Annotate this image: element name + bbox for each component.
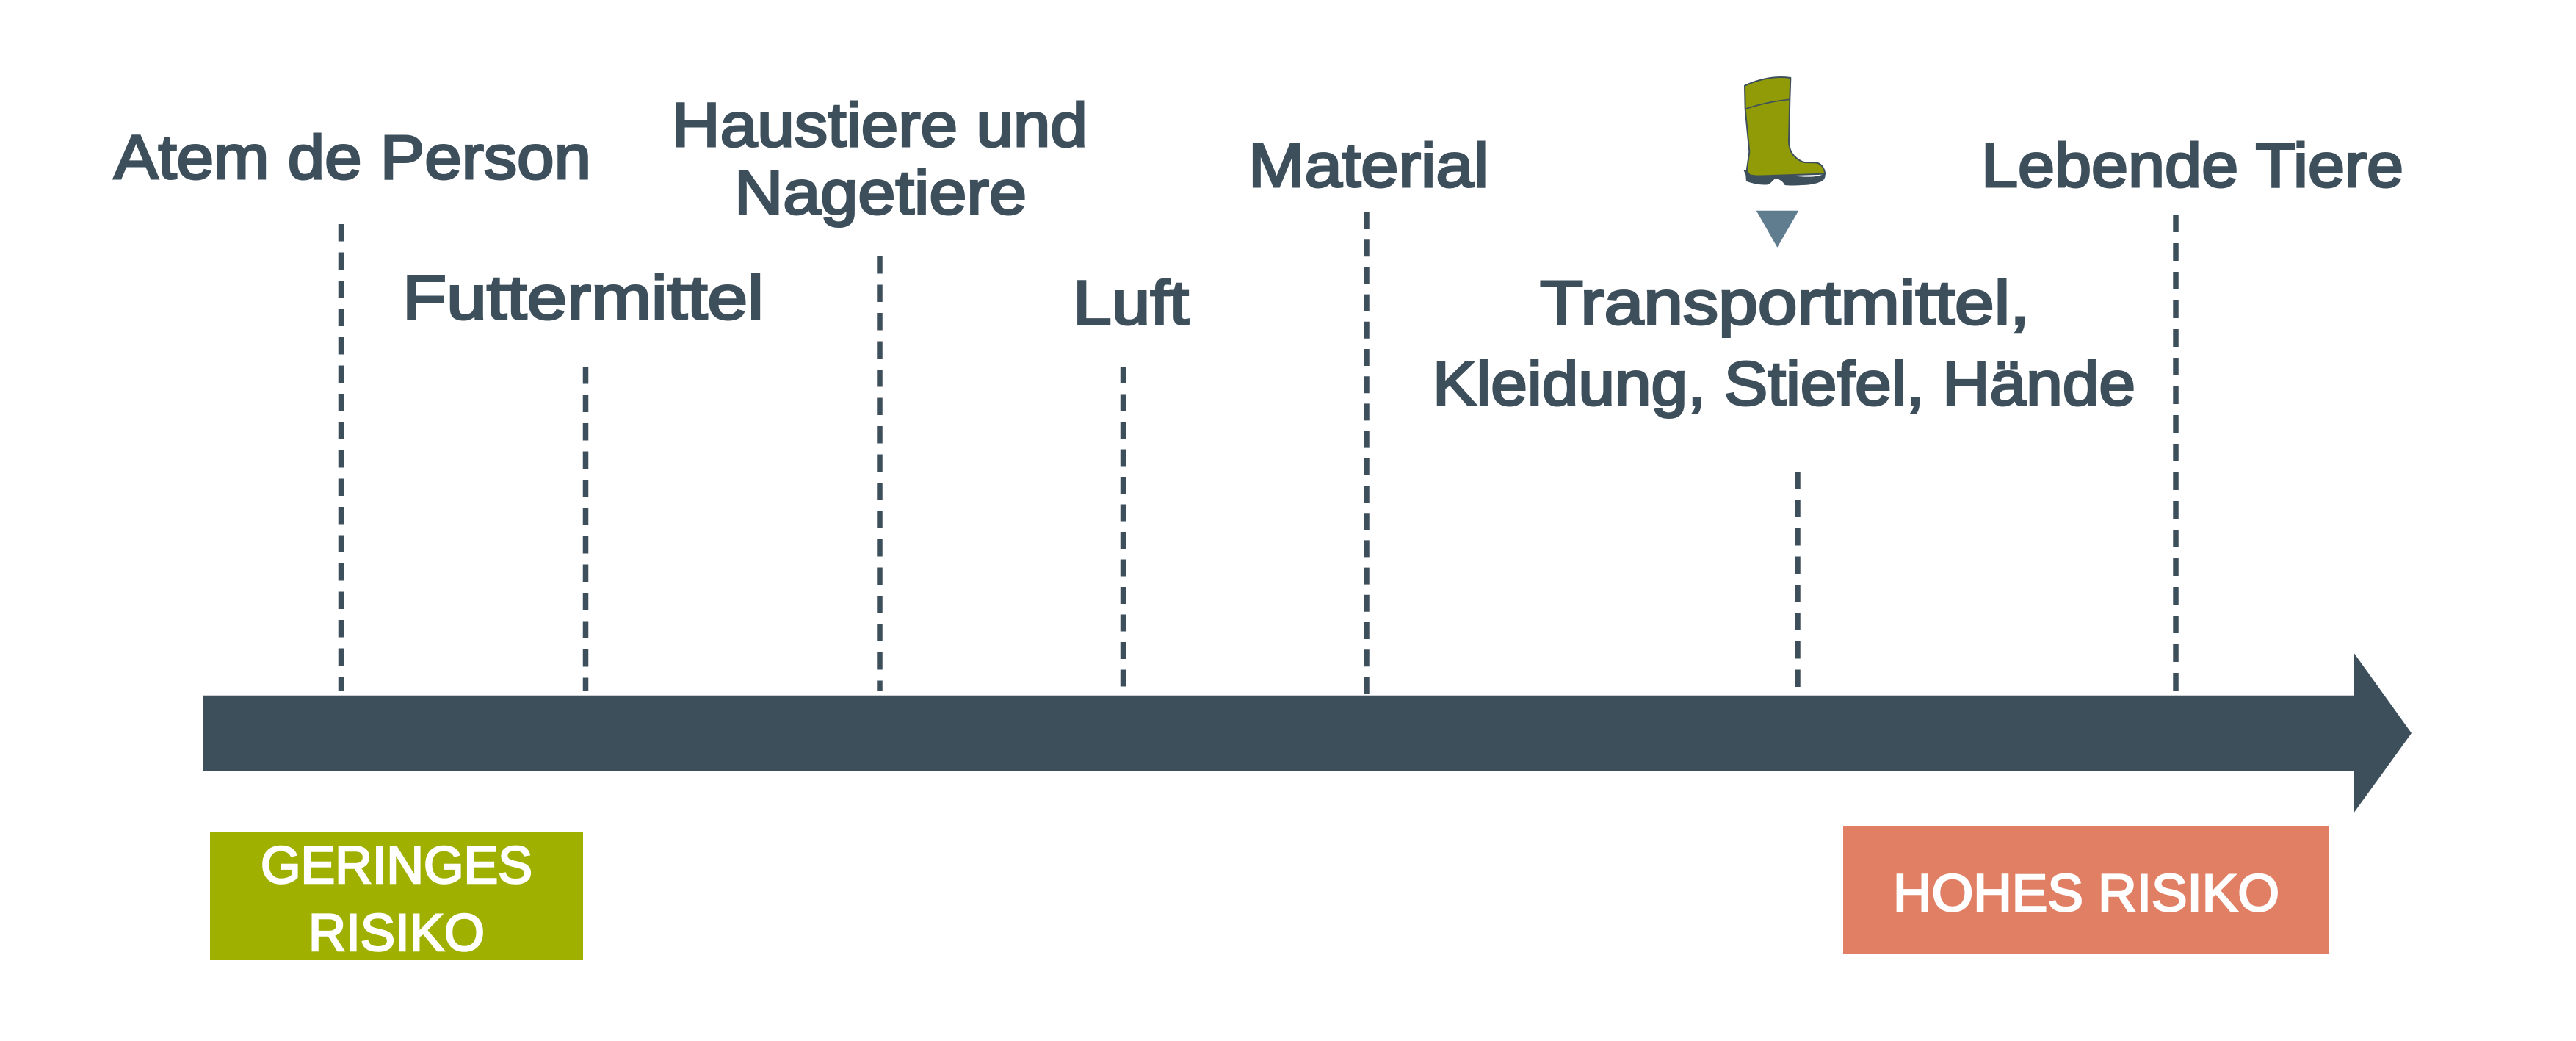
box: low risk: [210, 832, 583, 962]
label: Lebende Tiere: Lebende Tiere: [1981, 131, 2403, 200]
label: Atem de Person: Atem de Person: [114, 123, 591, 192]
label: Haustiere und Nagetiere: Haustiere und: [672, 90, 1088, 159]
label: Material: Material: [1248, 131, 1488, 200]
arrow: risk axis: [203, 652, 2412, 813]
icon: boot: [1744, 77, 1826, 185]
label: Futtermittel: Futtermittel: [402, 263, 764, 332]
box: high risk: [1843, 826, 2329, 954]
label: Luft: Luft: [1073, 268, 1189, 337]
label: Haustiere und Nagetiere: [672, 90, 1088, 691]
label: Transportmittel, Kleidung, Stiefel, Hände: Kleidung, Stiefel, Hände: [1433, 349, 2135, 418]
label: Transportmittel, Kleidung, Stiefel, Hände: [1433, 268, 2135, 691]
label: Transportmittel, Kleidung, Stiefel, Hände: Transportmittel,: [1540, 268, 2030, 337]
label: Haustiere und Nagetiere: Nagetiere: [734, 158, 1027, 227]
box: high risk: HOHES RISIKO: [1893, 865, 2279, 923]
icon: down triangle: [1756, 211, 1798, 248]
box: low risk: GERINGES: [261, 837, 532, 895]
box: low risk: RISIKO: [308, 904, 485, 962]
